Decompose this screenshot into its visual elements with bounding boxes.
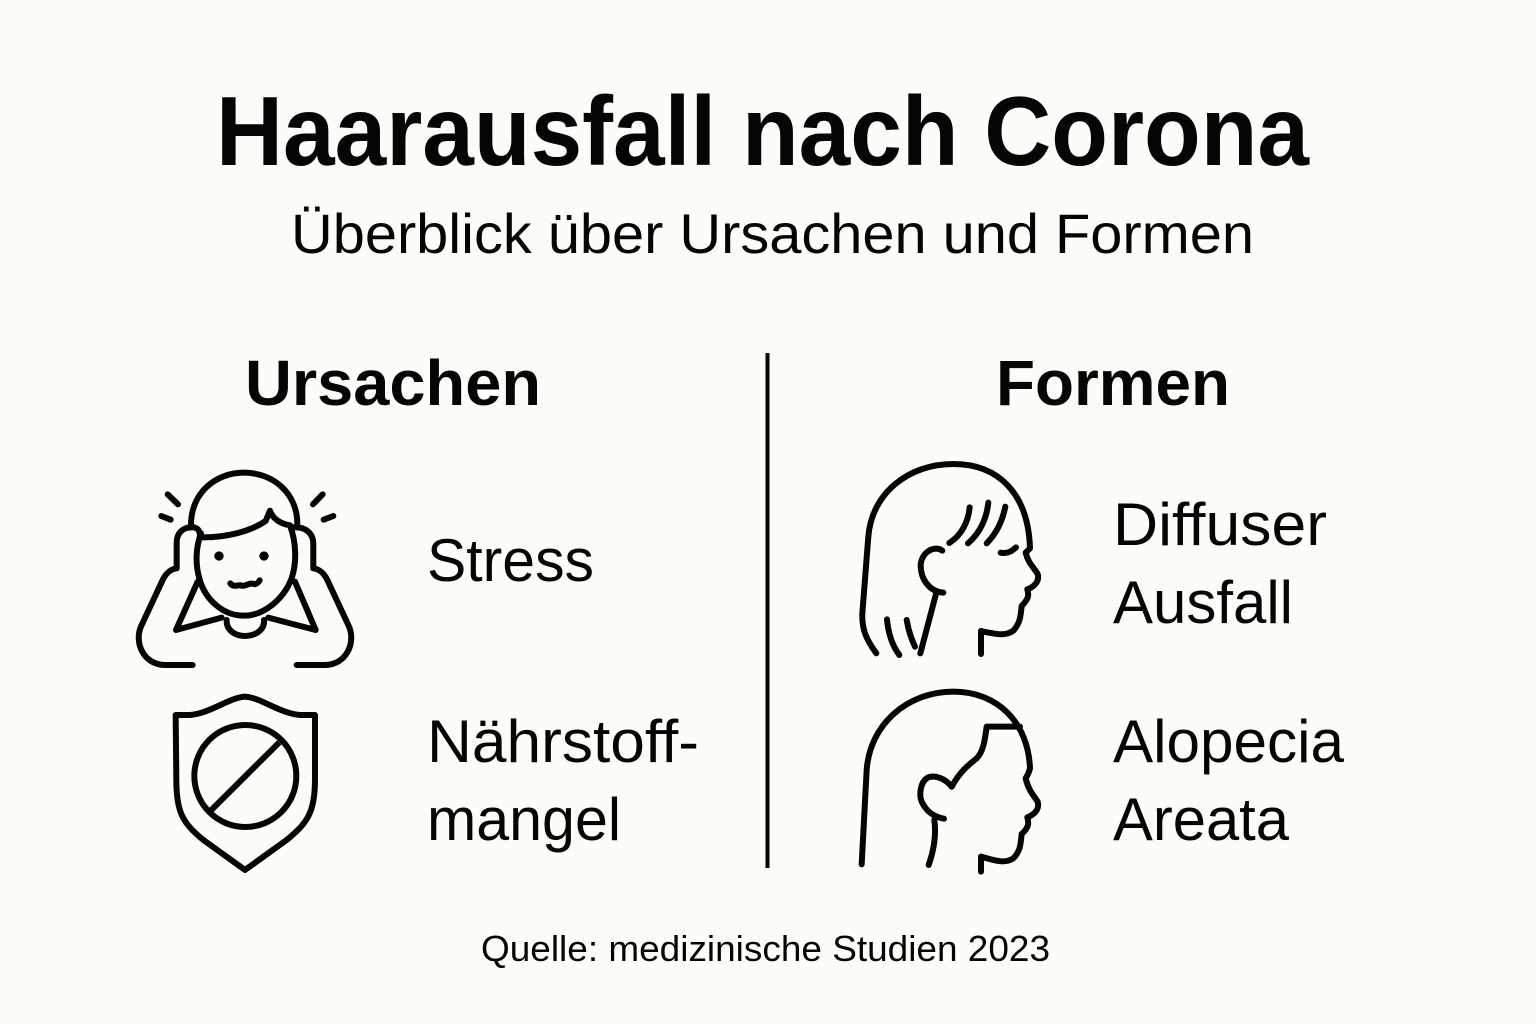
label: Alopecia Areata: [1113, 708, 1345, 853]
label: Alopecia Areata: Alopecia: [1113, 708, 1345, 775]
center divider: [766, 353, 770, 868]
icon: head with diffuse hair loss: [862, 464, 1038, 655]
icon: shield with prohibition sign: [176, 697, 315, 870]
label: Nährstoffmangel: mangel: [427, 786, 621, 853]
icon: stressed person: [139, 473, 351, 665]
label: Diffuser Ausfall: [1113, 491, 1327, 636]
label: Diffuser Ausfall: Diffuser: [1113, 491, 1327, 558]
heading: Ursachen: Ursachen: [245, 347, 541, 419]
icon: head with alopecia areata: [862, 692, 1038, 872]
heading: Formen: Formen: [996, 347, 1230, 419]
source note: Quelle: medizinische Studien 2023: [481, 928, 1050, 969]
label: Diffuser Ausfall: Ausfall: [1113, 569, 1293, 636]
label: Nährstoffmangel: Nährstoff-: [427, 708, 699, 775]
label: Alopecia Areata: Areata: [1113, 786, 1290, 853]
title: Haarausfall nach Corona: [216, 76, 1310, 186]
label: Nährstoffmangel: [427, 708, 699, 853]
label: Stress: Stress: [427, 527, 594, 594]
subtitle: Überblick über Ursachen und Formen: [291, 202, 1254, 265]
